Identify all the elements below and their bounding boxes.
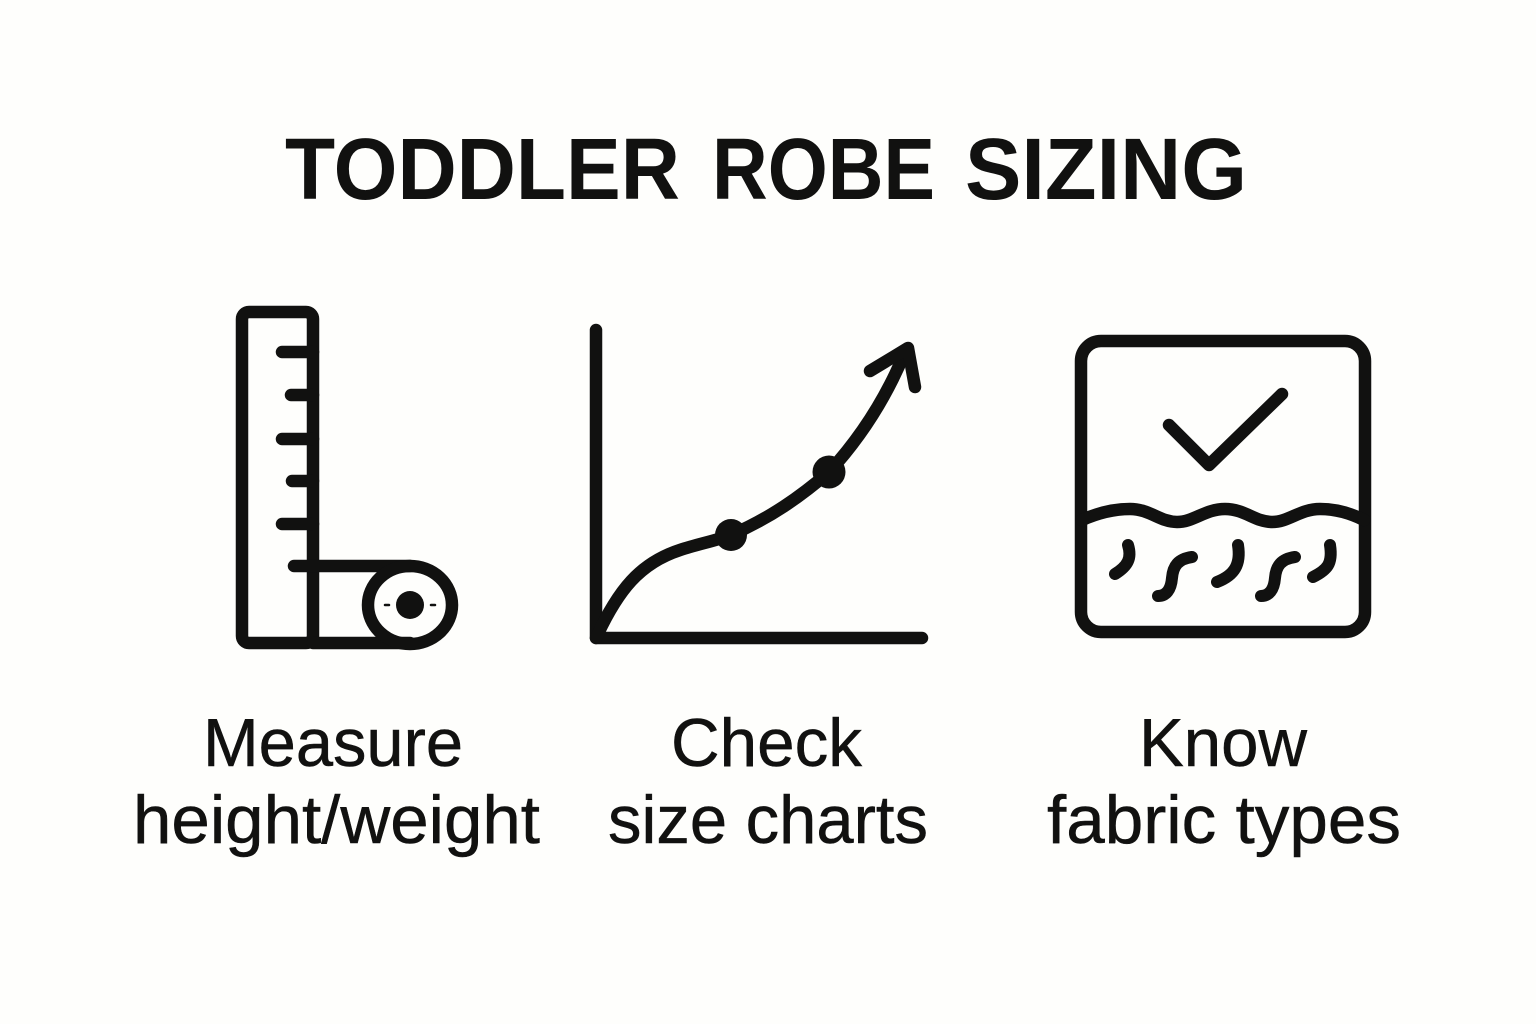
label: check size charts: Check — [671, 705, 863, 781]
title: TODDLER — [285, 121, 680, 218]
label: measure height/weight — [133, 705, 540, 858]
title: ROBE — [712, 121, 935, 218]
title: SIZING — [965, 121, 1247, 218]
label: measure height/weight: Measure — [203, 705, 463, 781]
label: measure height/weight: height/weight — [133, 782, 540, 858]
title — [285, 121, 1247, 218]
label: know fabric types: fabric types — [1047, 782, 1401, 858]
icon: measuring tape — [242, 312, 452, 644]
label: check size charts: size charts — [608, 782, 928, 858]
label: check size charts — [608, 705, 928, 858]
label: know fabric types — [1047, 705, 1401, 858]
label: know fabric types: Know — [1139, 705, 1308, 781]
icon: growth chart — [596, 330, 922, 638]
icon: fabric check — [1081, 341, 1365, 632]
